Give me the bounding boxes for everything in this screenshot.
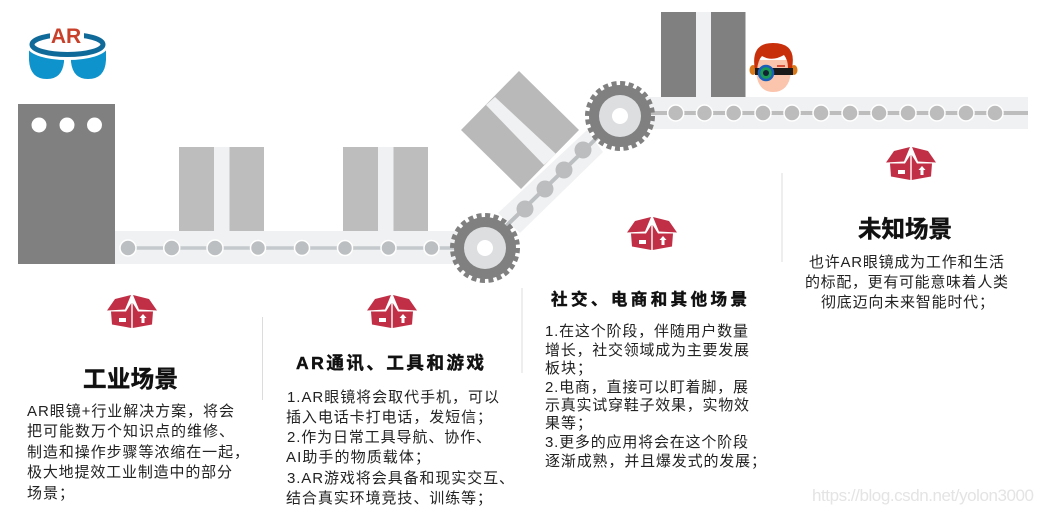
heading: social and e-commerce: 社交、电商和其他场景: [551, 289, 747, 309]
text block: industrial: 极大地提效工业制造中的部分: [27, 464, 232, 481]
watermark: https://blog.csdn.net/yolon3000: [812, 486, 1034, 505]
icon: lower gear: [452, 216, 518, 280]
conveyor: lower horizontal belt: [115, 231, 475, 264]
package: second grey box: [343, 147, 428, 231]
text block: industrial: AR眼镜+行业解决方案，将会: [27, 402, 234, 420]
text block: unknown: 彻底迈向未来智能时代；: [821, 293, 994, 311]
text block: social and e-commerce: 3.更多的应用将会在这个阶段: [545, 433, 748, 451]
conveyor: diagonal belt: [498, 130, 605, 233]
icon: red box, social: [627, 217, 677, 250]
text block: social and e-commerce: 逐渐成熟，并且爆发式的发展；: [545, 453, 766, 470]
icon: upper gear: [588, 84, 652, 148]
icon: AR glasses logo: AR: [51, 25, 81, 48]
text block: social and e-commerce: 板块；: [545, 359, 592, 377]
text block: industrial: 制造和操作步骤等浓缩在一起，: [27, 443, 249, 461]
text block: social and e-commerce: 2.电商，直接可以盯着脚，展: [545, 379, 748, 396]
text block: unknown: 的标配，更有可能意味着人类: [805, 273, 1008, 291]
text block: communications: [286, 388, 514, 507]
text block: communications: 2.作为日常工具导航、协作、: [287, 429, 491, 446]
text block: social and e-commerce: 1.在这个阶段，伴随用户数量: [545, 323, 748, 340]
text block: communications: 3.AR游戏将会具备和现实交互、: [287, 469, 514, 487]
icon: red box, unknown: [886, 147, 936, 180]
heading: communications: AR通讯、工具和游戏: [296, 353, 484, 373]
machine: dark factory block: [18, 104, 115, 264]
text block: communications: 插入电话卡打电话，发短信；: [286, 409, 492, 426]
text block: social and e-commerce: 果等；: [545, 414, 592, 432]
text block: industrial: 把可能数万个知识点的维修、: [27, 423, 234, 440]
text block: industrial: 场景；: [27, 485, 74, 502]
package: first grey box: [179, 147, 264, 231]
conveyor: upper horizontal belt: [640, 97, 1028, 129]
text block: unknown: [805, 253, 1008, 311]
icon: person wearing AR headset: [750, 43, 798, 92]
package: tilted grey box: [461, 71, 579, 189]
text block: social and e-commerce: 示真实试穿鞋子效果，实物效: [545, 396, 749, 414]
divider 1: [262, 317, 264, 400]
text block: social and e-commerce: [545, 323, 766, 470]
icon: AR glasses logo: [25, 25, 110, 79]
text block: social and e-commerce: 增长，社交领域成为主要发展: [545, 341, 749, 359]
text block: communications: 结合真实环境竞技、训练等；: [286, 489, 492, 507]
heading: unknown: 未知场景: [858, 216, 952, 242]
heading: industrial: 工业场景: [83, 366, 178, 392]
divider 2: [521, 288, 523, 373]
divider 3: [781, 173, 783, 262]
text block: communications: AI助手的物质载体；: [286, 449, 430, 466]
text block: communications: 1.AR眼镜将会取代手机，可以: [287, 388, 499, 406]
package: dark box on top belt: [661, 12, 746, 97]
text block: industrial: [27, 402, 249, 502]
icon: red box, communications: [367, 295, 417, 328]
text block: unknown: 也许AR眼镜成为工作和生活: [809, 253, 1004, 271]
icon: red box, industrial: [107, 295, 157, 328]
